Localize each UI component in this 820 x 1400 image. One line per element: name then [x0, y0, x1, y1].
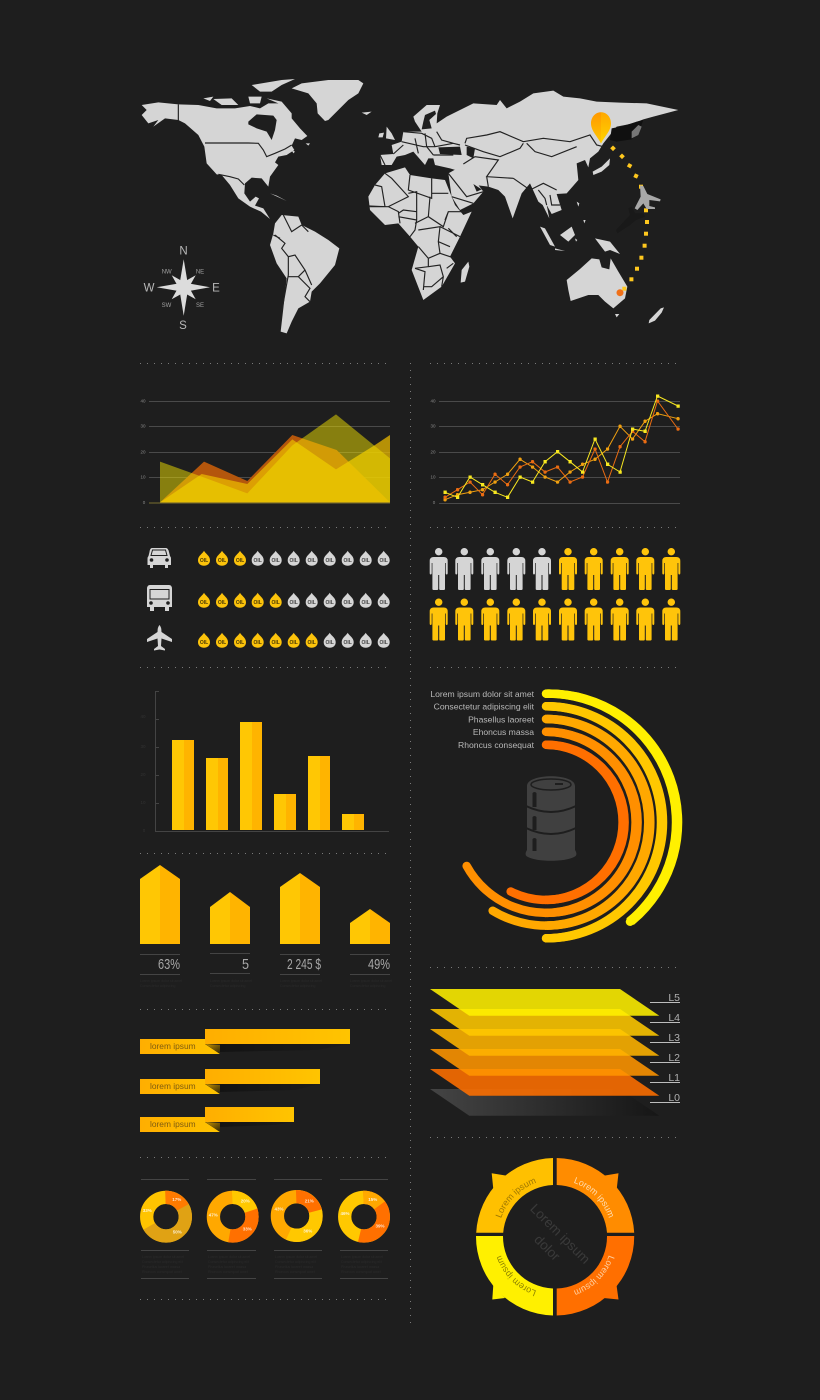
arc 5	[511, 745, 623, 900]
series yellow	[445, 396, 678, 497]
ring center text: dolor	[531, 1232, 563, 1264]
donut 4: Phasellus laoreet massa	[341, 1265, 379, 1269]
oil drops row: bus: OIL	[308, 600, 316, 606]
donut 4	[340, 1180, 388, 1278]
oil drops row: car	[198, 551, 390, 566]
oil drops row: car: OIL	[236, 558, 244, 564]
layer L2	[430, 1049, 659, 1076]
arc 2	[546, 706, 662, 938]
donut 3: 36%	[303, 1229, 312, 1234]
Australia	[567, 258, 627, 308]
oil drops row: plane: OIL	[326, 640, 334, 646]
map pin	[591, 112, 611, 144]
segment bottom-right	[556, 1236, 634, 1316]
ribbon bar 3	[140, 1107, 294, 1132]
oil drops row: car: OIL	[362, 558, 370, 564]
axis labels: 10	[140, 474, 146, 480]
arc 3	[493, 719, 649, 926]
donut 2: 33%	[243, 1226, 252, 1231]
segmented ring	[476, 1158, 634, 1316]
house stat: 49%: Lorem ipsum dolor sit amet	[350, 979, 392, 983]
compass labels: SW	[162, 303, 172, 309]
bus icon	[147, 585, 172, 611]
donut 1: 50%	[173, 1230, 182, 1235]
oil drops row: car: OIL	[218, 558, 226, 564]
area chart	[140, 398, 390, 505]
oil drops row: plane: OIL	[236, 640, 244, 646]
layer labels: L5	[668, 992, 680, 1004]
oil drops row: bus: OIL	[236, 600, 244, 606]
oil drops row: bus: OIL	[254, 600, 262, 606]
radial chart labels: Rhoncus consequat	[458, 740, 535, 750]
Greenland	[292, 80, 363, 121]
oil drops row: plane: OIL	[272, 640, 280, 646]
axis labels: 30	[140, 744, 146, 749]
donut 4: Consectetur adipiscing elit	[341, 1260, 382, 1264]
segment bottom-right: Lorem ipsum	[574, 1256, 614, 1295]
Americas borders	[178, 104, 312, 312]
layer labels: L0	[668, 1092, 680, 1104]
axis labels	[140, 398, 146, 505]
house stat: 5: 5	[242, 956, 249, 973]
house stat: 2245 $	[280, 873, 322, 988]
donut 1: Phasellus laoreet massa	[142, 1265, 180, 1269]
layer L5	[430, 989, 659, 1016]
country borders	[368, 132, 603, 290]
axis labels: 30	[430, 424, 436, 428]
compass labels: E	[212, 282, 220, 294]
donut 2: Lorem ipsum dolor sit amet	[208, 1255, 250, 1259]
donut 1: 17%	[172, 1197, 181, 1202]
segment top-left: Lorem ipsum	[496, 1178, 536, 1218]
arc 4	[467, 732, 637, 913]
oil drops row: bus: OIL	[362, 600, 370, 606]
layer labels: L3	[668, 1032, 680, 1044]
radial chart labels: Consectetur adipiscing elit	[434, 702, 535, 712]
segment bottom-left	[476, 1236, 553, 1316]
destination dot	[616, 289, 624, 296]
axis labels: 20	[140, 772, 146, 777]
axis labels: 20	[140, 450, 146, 454]
layered stack	[430, 989, 680, 1116]
oil drops row: car: OIL	[290, 558, 298, 564]
ribbon bar 1: lorem ipsum	[150, 1041, 196, 1051]
pin shadow over far east	[610, 120, 643, 142]
axis labels: 30	[140, 424, 146, 428]
flight route dots	[610, 145, 649, 291]
Hudson Bay	[248, 114, 277, 140]
donut 2: Phasellus laoreet massa	[208, 1265, 246, 1269]
plane shadow	[616, 207, 645, 233]
donut 2: Rhoncus consequat amet	[208, 1270, 248, 1274]
South America	[270, 215, 339, 333]
line chart	[430, 396, 680, 505]
bars	[172, 722, 354, 830]
ring center text: Lorem ipsum	[527, 1201, 593, 1267]
donut 1: 33%	[143, 1208, 152, 1213]
donut 3: Consectetur adipiscing elit	[275, 1260, 316, 1264]
series orange	[445, 401, 678, 497]
axis labels: 0	[433, 500, 436, 505]
compass labels: NE	[196, 270, 204, 276]
donut 2	[207, 1180, 256, 1278]
series amber	[445, 414, 678, 500]
donut 1	[141, 1180, 189, 1278]
arc 1	[546, 694, 677, 922]
house stat: 63%: Lorem ipsum dolor sit amet	[140, 979, 182, 983]
donut 1: Rhoncus consequat amet	[142, 1270, 182, 1274]
axis labels: 0	[143, 500, 146, 505]
compass star	[157, 259, 210, 316]
compass labels: W	[144, 282, 155, 294]
compass labels: N	[179, 246, 188, 258]
layer labels: L2	[668, 1052, 680, 1064]
oil drops row: bus	[198, 593, 390, 608]
compass labels	[144, 246, 220, 332]
axis labels: 20	[430, 450, 436, 454]
ribbon bar 3: lorem ipsum	[150, 1119, 196, 1129]
oil drops row: car: OIL	[380, 558, 388, 564]
axis labels: 10	[140, 800, 146, 805]
radial bar chart	[467, 694, 678, 938]
oil drops row: bus: OIL	[380, 600, 388, 606]
donut 3: 43%	[274, 1206, 284, 1211]
layer L1	[430, 1069, 659, 1096]
people pictogram	[430, 548, 680, 640]
layer L3	[430, 1029, 659, 1056]
house stat: 2245 $: 2 245 $	[287, 956, 321, 973]
donut 3: Rhoncus consequat amet	[275, 1270, 315, 1274]
oil drops row: plane: OIL	[200, 640, 208, 646]
donut 3: Lorem ipsum dolor sit amet	[275, 1255, 317, 1259]
segment top-right	[556, 1158, 634, 1233]
axis labels: 0	[143, 828, 146, 833]
series gold	[160, 435, 390, 502]
segment top-right: Lorem ipsum	[574, 1177, 613, 1218]
axis labels: 40	[140, 398, 146, 404]
donut 2: 47%	[209, 1212, 218, 1217]
Eurasia	[380, 91, 678, 218]
Africa	[368, 167, 472, 300]
donut 4: 46%	[340, 1211, 350, 1216]
bar chart	[140, 692, 389, 833]
world map	[142, 79, 678, 333]
house stat: 49%: Consectetur adipiscing	[350, 984, 385, 988]
house stat: 63%: Consectetur adipiscing	[140, 984, 175, 988]
Oceania and Indonesia islands	[540, 202, 664, 323]
Arabia	[448, 165, 483, 210]
oil drops row: plane: OIL	[308, 640, 316, 646]
donut 2: 20%	[241, 1198, 250, 1203]
icon: oil barrel	[526, 776, 576, 861]
donut 4: Rhoncus consequat amet	[341, 1270, 381, 1274]
house stat: 2245 $: Lorem ipsum dolor sit amet	[280, 979, 322, 983]
house stat: 49%: 49%	[368, 956, 390, 973]
oil drops row: plane: OIL	[218, 640, 226, 646]
house stat: 5: Consectetur adipiscing	[210, 984, 245, 988]
oil drops row: car: OIL	[326, 558, 334, 564]
axis labels	[430, 398, 436, 505]
oil drops row: bus: OIL	[218, 600, 226, 606]
house stat: 5	[210, 892, 252, 988]
compass labels: SE	[196, 303, 204, 309]
oil drops row: car: OIL	[344, 558, 352, 564]
ribbon bar 1	[140, 1029, 350, 1054]
oil drops row: car: OIL	[308, 558, 316, 564]
series brown	[160, 435, 390, 502]
oil drops row: plane	[198, 633, 390, 648]
car icon	[148, 548, 171, 568]
radial chart labels: Ehoncus massa	[473, 727, 534, 737]
North America	[142, 102, 307, 219]
radial chart labels	[430, 689, 535, 750]
oil drops row: car: OIL	[200, 558, 208, 564]
compass labels: NW	[162, 270, 172, 276]
ribbon bar 2: lorem ipsum	[150, 1081, 196, 1091]
segment bottom-left: Lorem ipsum	[497, 1256, 536, 1296]
house stat: 2245 $: Consectetur adipiscing	[280, 984, 315, 988]
Madagascar, British Isles, Japan	[378, 127, 610, 283]
ribbon bar 2	[140, 1069, 320, 1094]
donut 3: 21%	[305, 1199, 314, 1204]
layer L4	[430, 1009, 659, 1036]
house stat: 5: Lorem ipsum dolor sit amet	[210, 979, 252, 983]
series olive	[160, 414, 390, 502]
Arctic islands and Newfoundland	[203, 79, 310, 201]
donut 3	[274, 1180, 322, 1278]
segment top-left	[476, 1158, 553, 1233]
donut 2: Consectetur adipiscing elit	[208, 1260, 249, 1264]
house stat: 63%: 63%	[158, 956, 180, 973]
oil drops row: bus: OIL	[290, 600, 298, 606]
Iceland	[362, 112, 372, 115]
house stat: 63%	[140, 865, 182, 988]
oil drops row: plane: OIL	[380, 640, 388, 646]
layer labels: L4	[668, 1012, 680, 1024]
plane icon	[147, 625, 172, 650]
donut 4: Lorem ipsum dolor sit amet	[341, 1255, 383, 1259]
oil drops row: car: OIL	[272, 558, 280, 564]
inland seas	[422, 111, 482, 192]
axis labels	[140, 714, 146, 833]
compass labels: S	[179, 320, 187, 332]
layer labels	[668, 992, 680, 1104]
axis labels: 10	[430, 474, 436, 480]
plane icon	[635, 185, 661, 210]
compass	[144, 246, 220, 332]
donut 4: 15%	[368, 1197, 377, 1202]
donut 1: Lorem ipsum dolor sit amet	[142, 1255, 184, 1259]
radial chart labels: Phasellus laoreet	[468, 714, 535, 724]
oil drops row: plane: OIL	[344, 640, 352, 646]
donut 1: Consectetur adipiscing elit	[142, 1260, 183, 1264]
axis labels: 40	[430, 398, 436, 404]
oil drops row: bus: OIL	[326, 600, 334, 606]
oil drops row: bus: OIL	[344, 600, 352, 606]
oil drops row: plane: OIL	[290, 640, 298, 646]
layer labels: L1	[668, 1072, 680, 1084]
axis labels: 40	[140, 714, 146, 719]
layer L0	[430, 1089, 659, 1116]
house stat: 49%	[350, 909, 392, 988]
donut 4: 39%	[375, 1224, 385, 1229]
oil drops row: car: OIL	[254, 558, 262, 564]
oil drops row: plane: OIL	[362, 640, 370, 646]
radial chart labels: Lorem ipsum dolor sit amet	[430, 689, 535, 699]
oil drops row: bus: OIL	[272, 600, 280, 606]
donut 3: Phasellus laoreet massa	[275, 1265, 313, 1269]
oil drops row: bus: OIL	[200, 600, 208, 606]
oil drops row: plane: OIL	[254, 640, 262, 646]
